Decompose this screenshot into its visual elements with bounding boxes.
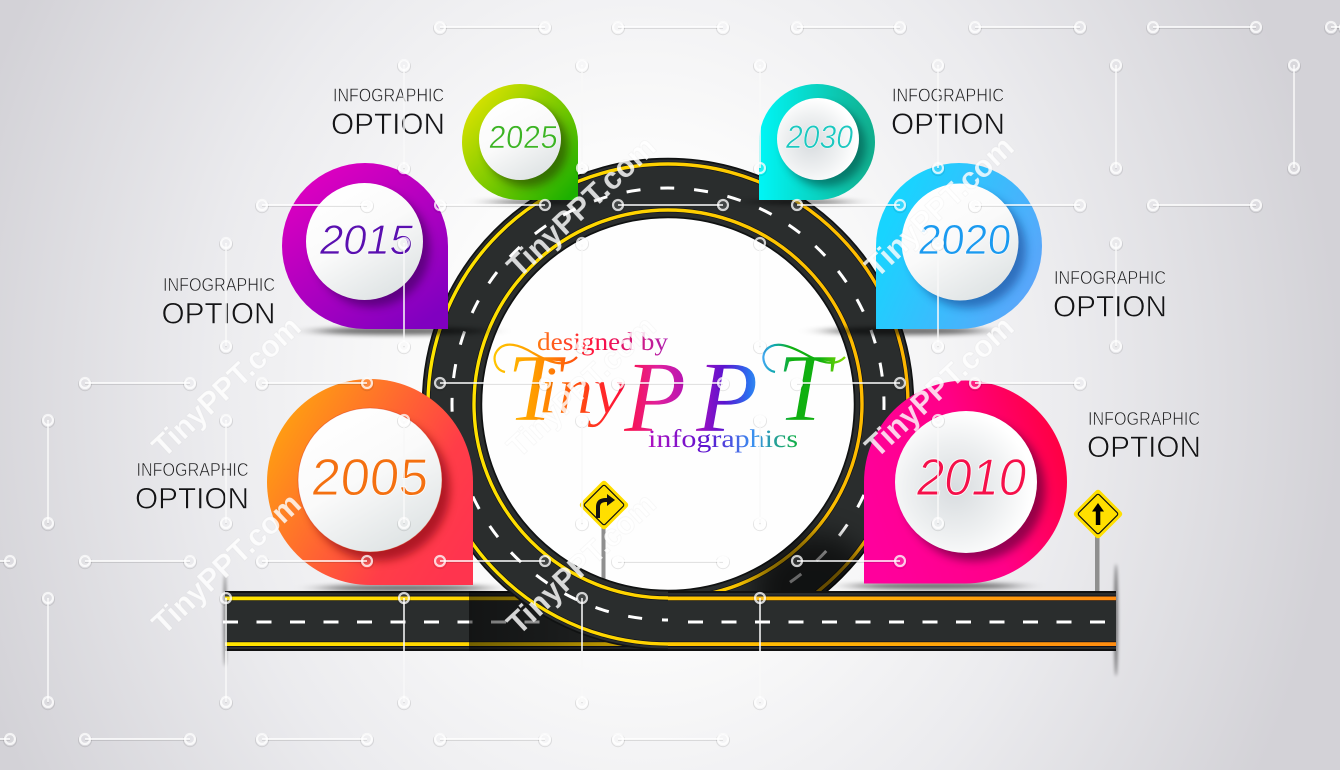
year 2025: 2025 xyxy=(487,119,560,155)
watermarks: TinyPPT.com xyxy=(145,309,308,464)
year 2010: 2010 xyxy=(916,449,1026,507)
road: circular loop xyxy=(428,164,908,644)
road: shadow where the loop dips under the road xyxy=(736,516,864,591)
pin: 2025 xyxy=(462,84,578,200)
ground shadows under pins xyxy=(315,200,1020,592)
watermarks: TinyPPT.com xyxy=(500,129,663,284)
signpost: straight sign pole xyxy=(1095,535,1100,593)
label: 2005 option xyxy=(135,460,249,516)
watermarks: TinyPPT.com xyxy=(858,309,1021,464)
label: 2015 option: OPTION xyxy=(162,298,276,330)
label: 2030 option: INFOGRAPHIC xyxy=(892,86,1004,106)
logo line: designed by: designed by xyxy=(537,329,669,356)
label: 2025 option xyxy=(331,86,445,141)
road: straight right section xyxy=(668,591,1116,651)
watermarks: TinyPPT.com xyxy=(858,129,1021,284)
watermarks xyxy=(145,129,1021,641)
pin: 2015 xyxy=(282,163,448,329)
label: 2030 option: OPTION xyxy=(891,108,1005,141)
watermarks: TinyPPT.com xyxy=(500,486,663,641)
logo wordmark: TinyPPT: P xyxy=(695,341,758,454)
pin: 2005 xyxy=(267,379,473,585)
signpost: curve sign pole xyxy=(602,525,606,580)
pin: 2030 xyxy=(759,84,875,200)
logo wordmark: TinyPPT: T xyxy=(777,334,837,441)
label: 2020 option: OPTION xyxy=(1053,290,1167,324)
label: 2015 option: INFOGRAPHIC xyxy=(163,275,275,295)
year 2030: 2030 xyxy=(785,119,853,155)
watermarks: TinyPPT.com xyxy=(145,486,308,641)
label: 2025 option: OPTION xyxy=(331,108,445,141)
logo: designed by TinyPPT infographics xyxy=(495,329,845,454)
road end shadows xyxy=(224,564,1118,676)
label: 2020 option: INFOGRAPHIC xyxy=(1054,268,1166,288)
year 2020: 2020 xyxy=(916,216,1013,263)
label: 2010 option xyxy=(1087,409,1201,464)
pin: 2020 xyxy=(876,163,1042,329)
icon: curve-right road sign xyxy=(579,480,629,530)
label: 2030 option xyxy=(891,86,1005,141)
loop interior xyxy=(481,217,855,591)
label: 2020 option xyxy=(1053,268,1167,324)
label: 2025 option: INFOGRAPHIC xyxy=(333,86,444,106)
year 2015: 2015 xyxy=(319,216,414,263)
label: 2015 option xyxy=(162,275,276,330)
label: 2005 option: OPTION xyxy=(135,482,249,516)
logo wordmark: TinyPPT: iny xyxy=(538,352,626,428)
road: straight left section xyxy=(223,591,668,651)
watermarks: TinyPPT.com xyxy=(500,309,663,464)
label: 2010 option: INFOGRAPHIC xyxy=(1088,409,1200,429)
label: 2005 option: INFOGRAPHIC xyxy=(136,460,248,480)
label: 2010 option: OPTION xyxy=(1087,431,1201,464)
logo line: infographics: infographics xyxy=(648,426,798,453)
year 2005: 2005 xyxy=(309,449,431,507)
pin: 2010 xyxy=(864,380,1067,584)
logo wordmark: TinyPPT xyxy=(495,334,845,454)
logo wordmark: TinyPPT: T xyxy=(507,334,567,441)
icon: straight-ahead road sign xyxy=(1073,489,1123,539)
logo wordmark: TinyPPT: P xyxy=(623,341,686,454)
